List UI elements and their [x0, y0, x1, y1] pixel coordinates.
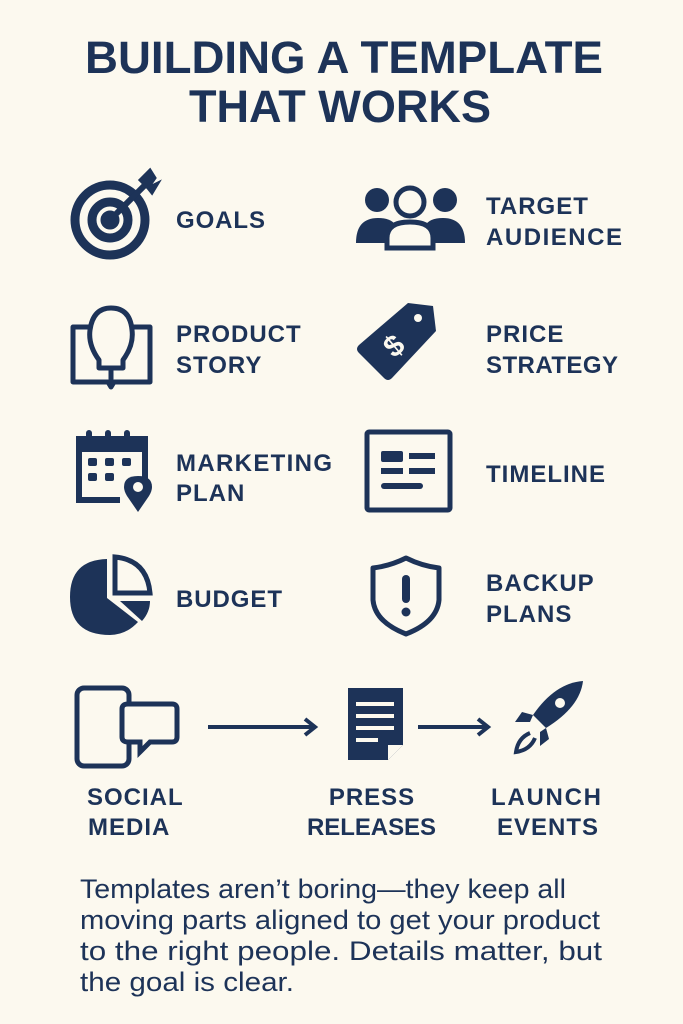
paragraph: the goal is clear.	[80, 967, 294, 997]
label: price strategy: STRATEGY	[486, 352, 619, 379]
icon: price tag	[357, 303, 436, 380]
label: launch events: EVENTS	[497, 814, 599, 841]
label: timeline: TIMELINE	[486, 461, 606, 488]
label: product story: PRODUCT	[176, 321, 302, 348]
arrow 2	[418, 719, 488, 735]
icon: timeline	[367, 432, 450, 510]
label: press releases: PRESS	[329, 784, 415, 811]
icon: rocket	[515, 681, 583, 752]
arrow 1	[208, 719, 315, 735]
label: target audience: AUDIENCE	[486, 224, 623, 251]
label: launch events	[491, 784, 602, 841]
label: product story	[176, 321, 302, 379]
label: backup plans	[486, 570, 595, 628]
paragraph: moving parts aligned to get your product	[80, 905, 601, 935]
label: target audience: TARGET	[486, 193, 589, 220]
paragraph: to the right people. Details matter, but	[80, 936, 603, 966]
label: press releases: RELEASES	[307, 814, 437, 841]
label: social media	[87, 784, 184, 841]
icon: social media	[77, 688, 177, 766]
label: target audience	[486, 193, 623, 251]
label: backup plans: BACKUP	[486, 570, 595, 597]
icon: calendar	[76, 430, 152, 512]
label: goals: GOALS	[176, 207, 266, 234]
label: press releases	[307, 784, 437, 841]
label: marketing plan: PLAN	[176, 480, 245, 507]
icon: bulb book	[73, 308, 150, 387]
icon: audience	[356, 188, 465, 248]
label: social media: MEDIA	[88, 814, 170, 841]
paragraph	[80, 874, 603, 997]
label: backup plans: PLANS	[486, 601, 572, 628]
title: THAT WORKS	[189, 81, 491, 132]
label: marketing plan: MARKETING	[176, 450, 333, 477]
label: marketing plan	[176, 450, 333, 507]
icon: target	[75, 170, 158, 255]
icon: press doc	[348, 688, 403, 760]
label: product story: STORY	[176, 352, 262, 379]
icon: pie chart	[70, 557, 150, 635]
label: social media: SOCIAL	[87, 784, 184, 811]
icon: shield	[373, 558, 439, 634]
label: budget: BUDGET	[176, 586, 283, 613]
label: launch events: LAUNCH	[491, 784, 602, 811]
icon: price tag: $	[377, 328, 412, 364]
label: price strategy: PRICE	[486, 321, 564, 348]
paragraph: Templates aren’t boring—they keep all	[80, 874, 566, 904]
title	[85, 32, 603, 132]
label: price strategy	[486, 321, 619, 379]
title: BUILDING A TEMPLATE	[85, 32, 603, 83]
